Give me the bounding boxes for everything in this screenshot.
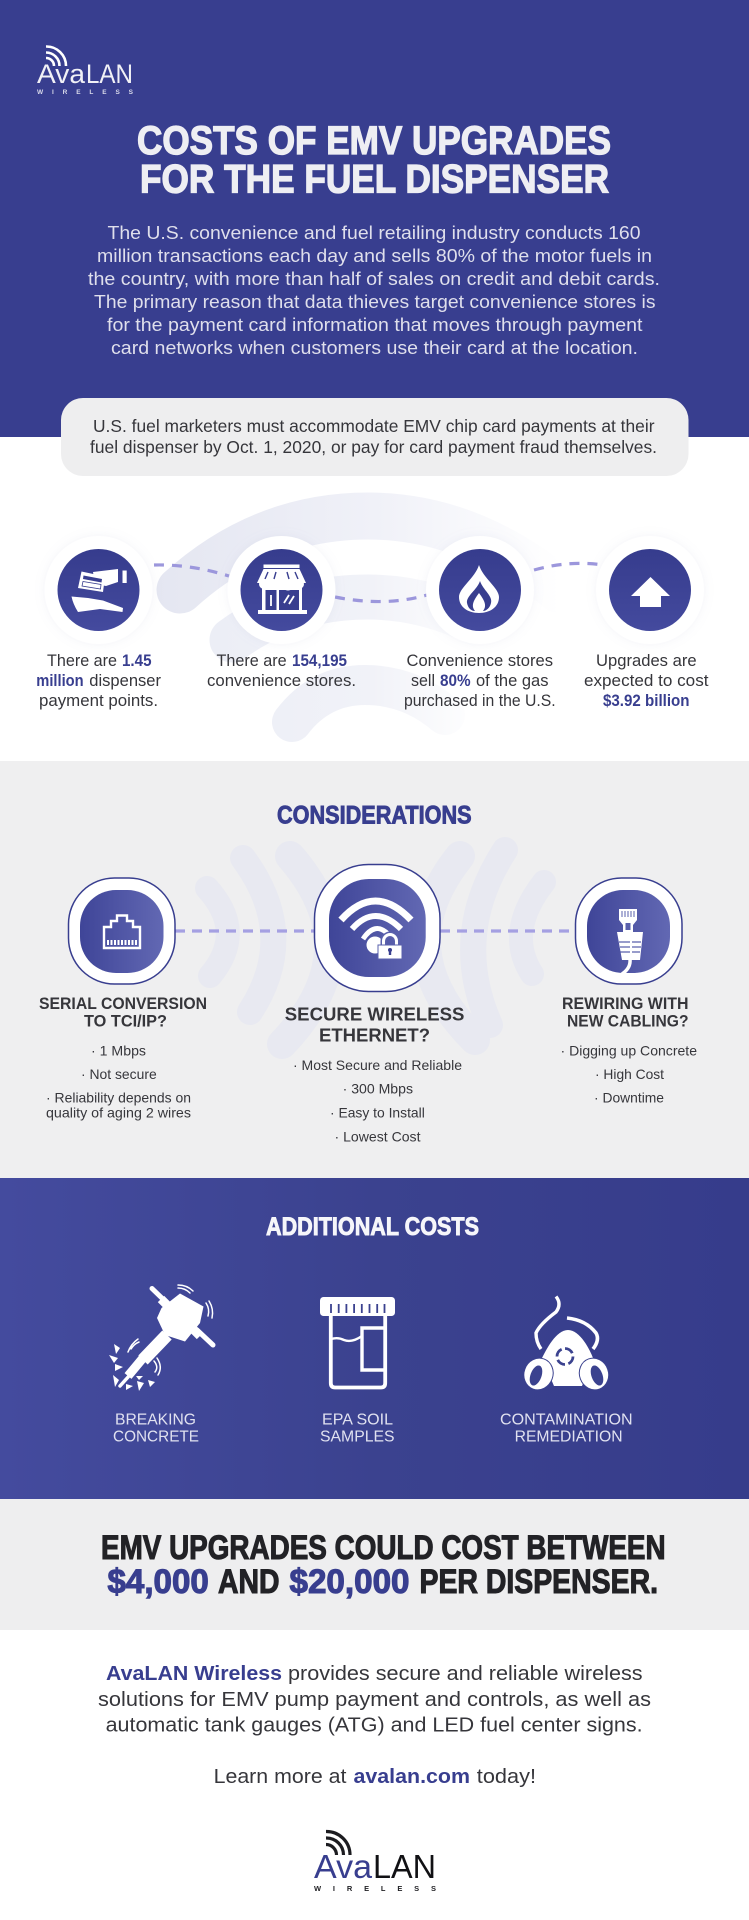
logo: AvaLAN white: LAN (86, 59, 133, 89)
icon: hand with card (44, 536, 152, 644)
option: rewiring (560, 878, 697, 1106)
label: CONCRETE (113, 1429, 199, 1446)
panel: considerations (0, 761, 749, 1178)
panel: header (0, 0, 749, 437)
intro text block: card networks when customers use their card at the location. (111, 337, 638, 358)
intro text block: for the payment card information that moves through payment (107, 314, 642, 335)
callout: EMV deadline (61, 398, 688, 476)
heading: CONSIDERATIONS (277, 802, 472, 830)
intro text block: The primary reason that data thieves target convenience stores is (94, 291, 656, 312)
banner headline: $4,000 (108, 1563, 209, 1601)
option text: SERIAL CONVERSION (39, 995, 207, 1013)
option text: · Downtime (594, 1090, 664, 1106)
background wifi symbol (180, 516, 560, 722)
stat text: $3.92 billion (603, 692, 690, 710)
stat text: of the gas (476, 672, 548, 690)
stat: dispenser payment points (36, 536, 162, 710)
heading: ADDITIONAL COSTS (266, 1213, 479, 1241)
option text: · High Cost (595, 1066, 664, 1082)
call to action: Learn more at (214, 1765, 347, 1788)
company description: provides secure and reliable wireless (288, 1662, 643, 1685)
stat text: 154,195 (292, 652, 347, 670)
label (113, 1411, 199, 1446)
callout: EMV deadline: U.S. fuel marketers must accommodate EMV chip card payments at their (93, 416, 655, 436)
stat text: 1.45 (122, 652, 152, 670)
option text: · 300 Mbps (343, 1081, 413, 1097)
stat text (207, 652, 356, 690)
icon: store (228, 536, 336, 644)
stat text: dispenser (89, 672, 162, 690)
icon: ethernet port (68, 878, 175, 984)
icon: jackhammer (109, 1285, 213, 1391)
item: contamination remediation (500, 1296, 633, 1446)
item: breaking concrete (109, 1285, 213, 1446)
stat text: sell (411, 672, 435, 690)
option text (285, 1005, 464, 1144)
stat text: expected to cost (584, 672, 709, 690)
company description (98, 1662, 651, 1737)
title: COSTS OF EMV UPGRADES (137, 119, 611, 163)
icon: flame (426, 536, 534, 644)
stat text (404, 652, 556, 710)
option text: SECURE WIRELESS (285, 1005, 464, 1025)
intro text block (88, 222, 660, 358)
title: FOR THE FUEL DISPENSER (140, 158, 609, 202)
option text: · Lowest Cost (334, 1128, 421, 1144)
intro text block: The U.S. convenience and fuel retailing industry conducts 160 (108, 222, 640, 243)
option text: NEW CABLING? (567, 1013, 688, 1031)
stat: share of gas (404, 536, 556, 710)
call to action (214, 1765, 536, 1788)
option text: REWIRING WITH (562, 995, 688, 1013)
banner headline: $20,000 (290, 1563, 410, 1601)
background signal arcs (207, 850, 544, 1044)
icon: sample jar (320, 1297, 395, 1388)
option: serial conversion (39, 878, 207, 1121)
stat text: million (36, 672, 84, 690)
option text: ETHERNET? (319, 1026, 430, 1046)
option text: · Reliability depends on (46, 1090, 191, 1106)
option text: · 1 Mbps (91, 1043, 146, 1059)
callout: EMV deadline: fuel dispenser by Oct. 1, 2020, or pay for card payment fraud themselves. (90, 437, 657, 457)
company description: solutions for EMV pump payment and controls, as well as (98, 1688, 651, 1711)
stat text: Convenience stores (406, 652, 553, 670)
stat text: 80% (440, 672, 471, 690)
banner headline (101, 1529, 666, 1601)
icon: wifi with padlock (314, 864, 440, 992)
label: BREAKING (115, 1411, 196, 1428)
call to action: avalan.com (354, 1765, 470, 1788)
logo: AvaLAN white: WIRELESS (37, 89, 134, 96)
logo: AvaLAN white: Ava (37, 59, 86, 89)
label (320, 1411, 395, 1446)
stat text: There are (47, 652, 117, 670)
item: EPA soil samples (320, 1297, 395, 1446)
icon: ethernet cable (576, 878, 682, 984)
panel: white stats section (0, 437, 749, 761)
logo: AvaLAN colour (314, 1831, 436, 1893)
logo: AvaLAN colour: LAN (373, 1848, 436, 1885)
icon: respirator mask (519, 1296, 613, 1394)
banner headline: AND (218, 1563, 280, 1601)
option text: · Most Secure and Reliable (293, 1057, 462, 1073)
company description: AvaLAN Wireless (106, 1662, 282, 1685)
panel: cost range banner (0, 1499, 749, 1630)
stat text (584, 652, 709, 710)
option text (39, 995, 207, 1121)
logo: AvaLAN white (37, 46, 134, 96)
option text: TO TCI/IP? (84, 1013, 167, 1031)
logo: AvaLAN colour: WIRELESS (314, 1884, 436, 1893)
title (137, 119, 611, 202)
dashed connectors (154, 563, 603, 602)
option text (560, 995, 697, 1106)
stat: upgrade cost (584, 536, 709, 710)
label: EPA SOIL (322, 1411, 393, 1428)
dashed connector line (175, 929, 575, 933)
company description: automatic tank gauges (ATG) and LED fuel center signs. (106, 1714, 643, 1737)
stat text (36, 652, 162, 710)
call to action: today! (477, 1765, 536, 1788)
panel: additional costs (0, 1178, 749, 1499)
panel: footer (0, 1630, 749, 1920)
option text: · Easy to Install (330, 1105, 425, 1121)
option: secure wireless ethernet (285, 864, 464, 1144)
intro text block: million transactions each day and sells 80% of the motor fuels in (97, 245, 652, 266)
stat text: purchased in the U.S. (404, 692, 556, 710)
stat text: payment points. (39, 692, 158, 710)
label: REMEDIATION (515, 1429, 623, 1446)
label: SAMPLES (320, 1429, 395, 1446)
intro text block: the country, with more than half of sales on credit and debit cards. (88, 268, 660, 289)
option text: · Digging up Concrete (560, 1043, 697, 1059)
stat text: Upgrades are (596, 652, 697, 670)
option text: quality of aging 2 wires (46, 1105, 191, 1121)
logo: AvaLAN colour: Ava (314, 1848, 373, 1885)
banner headline: PER DISPENSER. (420, 1563, 658, 1601)
stat: convenience stores (207, 536, 356, 690)
stat text: There are (216, 652, 287, 670)
option text: · Not secure (81, 1066, 157, 1082)
label (500, 1411, 633, 1446)
icon: up arrow (596, 536, 704, 644)
stat text: convenience stores. (207, 672, 356, 690)
label: CONTAMINATION (500, 1411, 633, 1428)
